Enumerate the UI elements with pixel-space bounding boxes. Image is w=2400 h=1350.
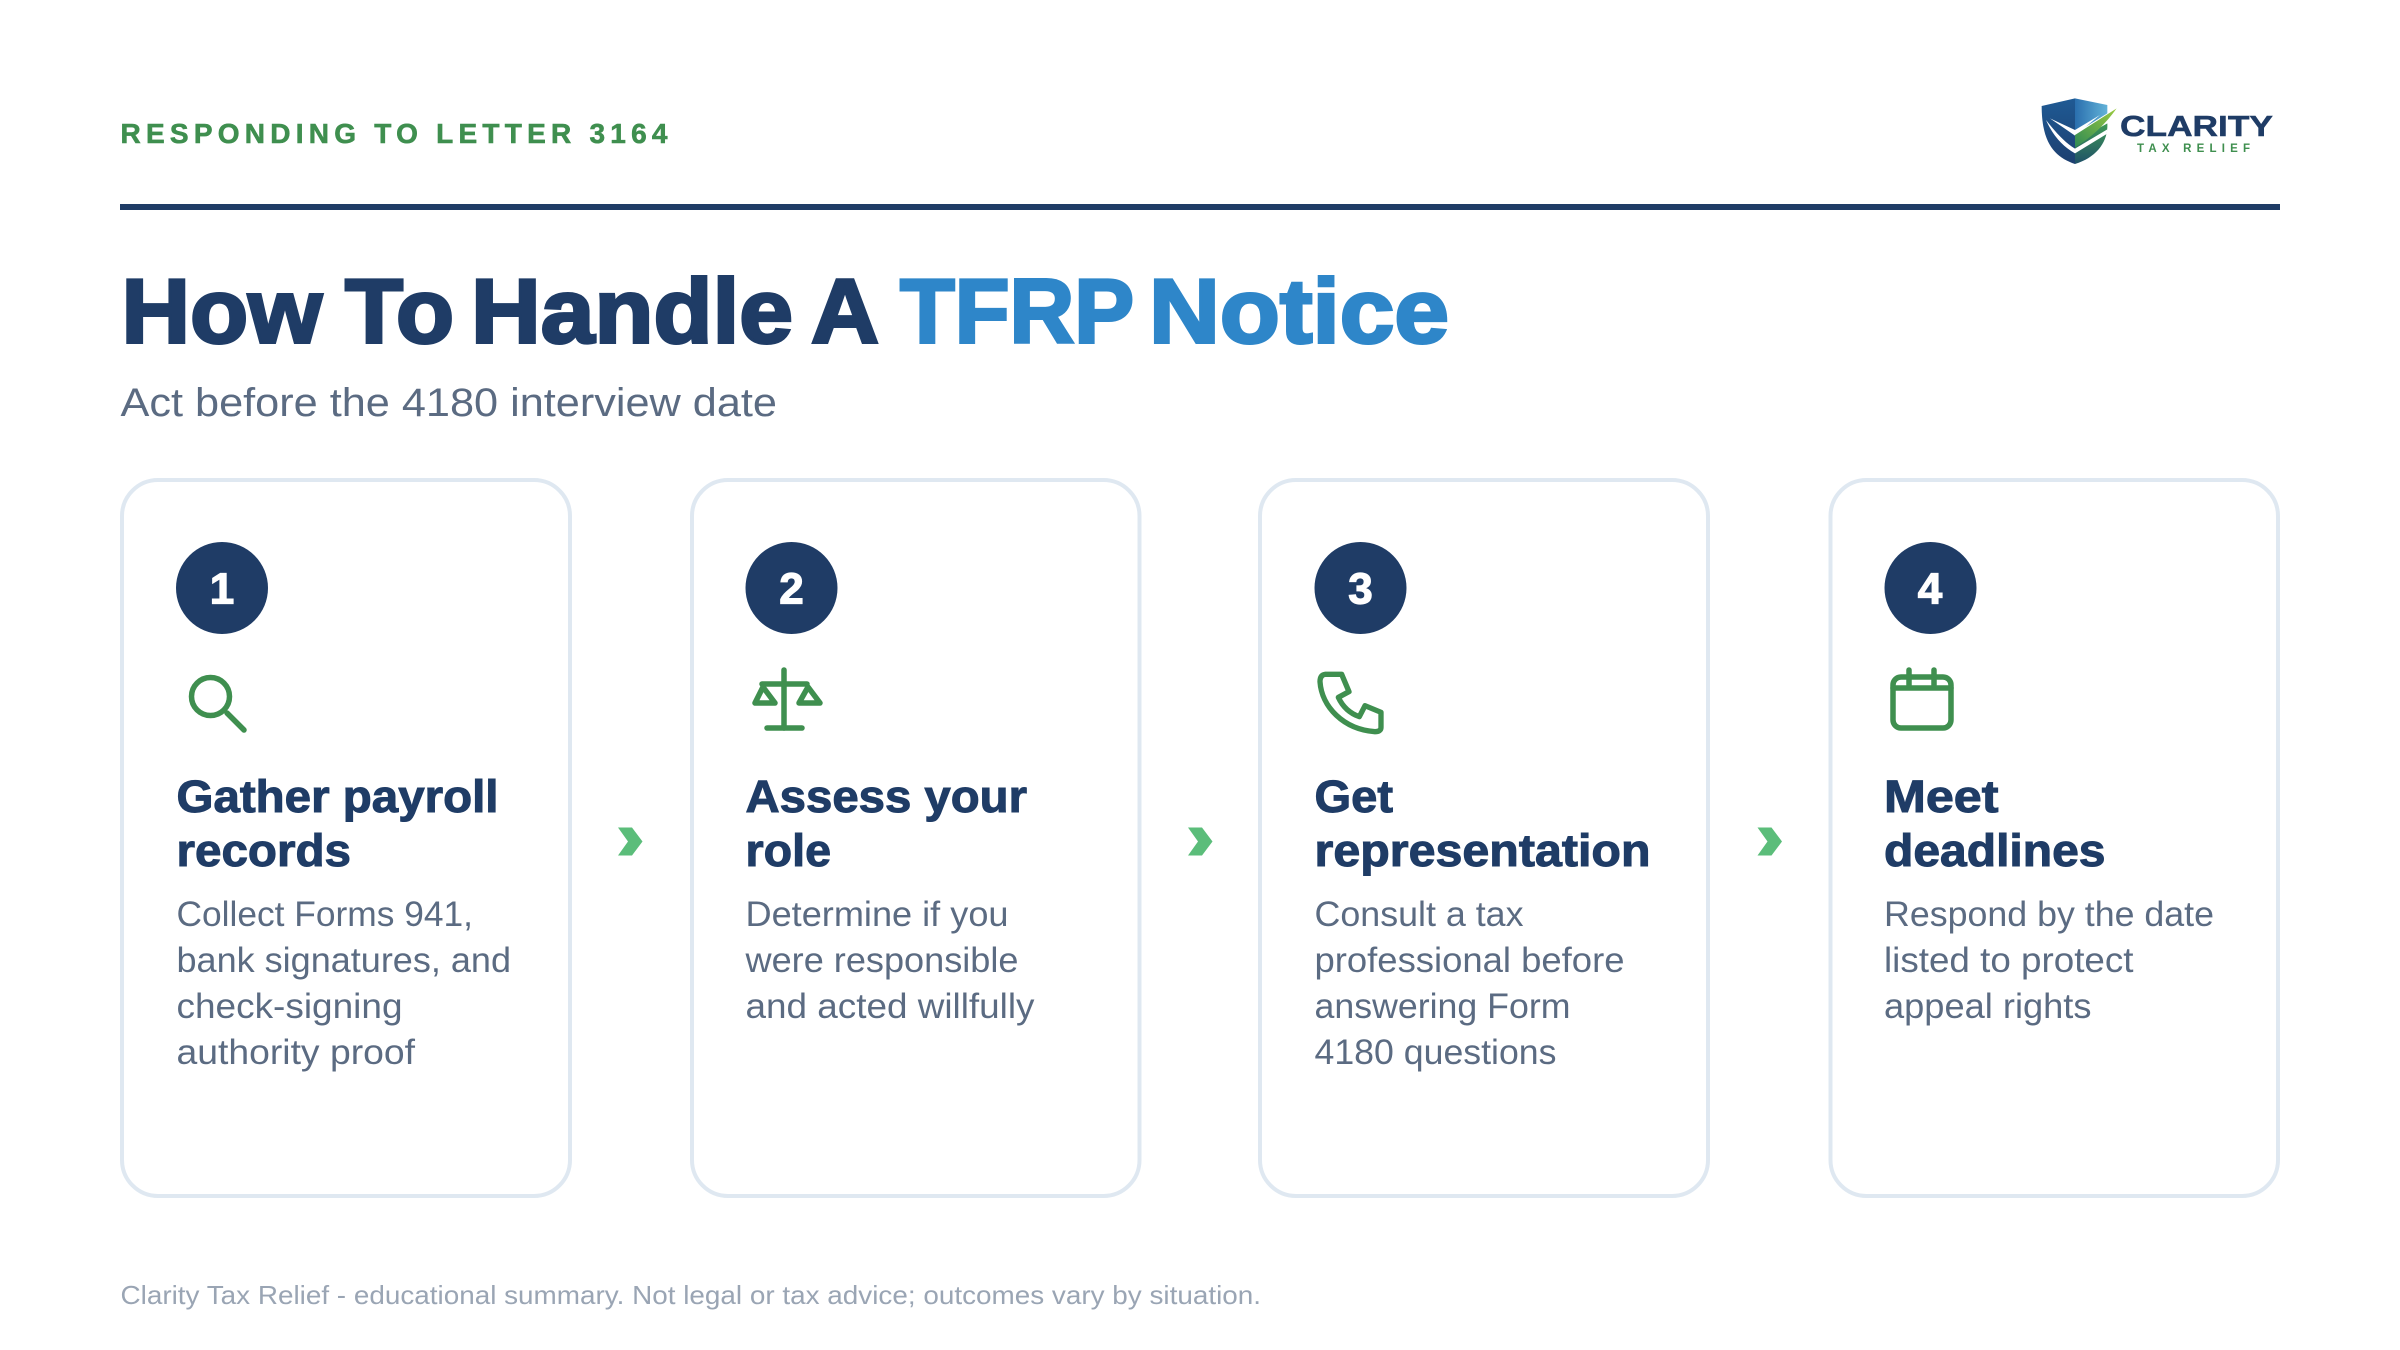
step 1 heading bbox=[176, 771, 498, 876]
step 4 description bbox=[1884, 895, 2214, 1026]
footer disclaimer: Clarity Tax Relief - educational summary. Not legal or tax advice; outcomes vary by situation. bbox=[120, 1280, 1261, 1310]
panel: step 4 meet deadlines bbox=[1830, 480, 2278, 1196]
step 3 heading: representation bbox=[1314, 825, 1650, 876]
step number 1: 1 bbox=[210, 564, 234, 614]
arrow: step 3 to 4 bbox=[1758, 828, 1782, 856]
step 3 description: professional before bbox=[1314, 941, 1624, 980]
step 3 description: answering Form bbox=[1314, 987, 1570, 1026]
title: TFRP bbox=[900, 262, 1134, 362]
step 4 description: appeal rights bbox=[1884, 987, 2092, 1026]
step 4 heading: deadlines bbox=[1884, 825, 2106, 876]
panel: step 3 get representation bbox=[1260, 480, 1708, 1196]
step 3 description: Consult a tax bbox=[1314, 895, 1524, 934]
step 3 heading: Get bbox=[1314, 771, 1393, 822]
panel: step 1 gather payroll records bbox=[122, 480, 570, 1196]
step 2 heading: role bbox=[746, 825, 831, 876]
step number 2 bbox=[746, 542, 838, 634]
step number 2: 2 bbox=[779, 564, 804, 614]
icon: magnifier bbox=[192, 678, 244, 730]
step 2 description: were responsible bbox=[744, 941, 1018, 980]
arrow: step 1 to 2 bbox=[618, 828, 642, 856]
step number 3 bbox=[1314, 542, 1406, 634]
icon: scales bbox=[755, 670, 820, 728]
step 1 description: bank signatures, and bbox=[176, 941, 511, 980]
step 4 heading bbox=[1884, 771, 2106, 876]
title bbox=[122, 262, 1449, 362]
step 1 heading: records bbox=[176, 825, 351, 876]
step number 3: 3 bbox=[1348, 564, 1373, 614]
step 1 description: check-signing bbox=[176, 987, 402, 1026]
panel: step 2 assess your role bbox=[692, 480, 1140, 1196]
title: To bbox=[345, 262, 454, 362]
eyebrow heading: RESPONDING TO LETTER 3164 bbox=[120, 118, 668, 149]
step 1 heading: Gather payroll bbox=[176, 771, 498, 822]
step 4 description: listed to protect bbox=[1884, 941, 2134, 980]
arrow: step 2 to 3 bbox=[1188, 828, 1212, 856]
step 2 description: and acted willfully bbox=[746, 987, 1035, 1026]
step number 1 bbox=[176, 542, 268, 634]
step 4 heading: Meet bbox=[1884, 771, 1999, 822]
step 1 description: Collect Forms 941, bbox=[176, 895, 473, 934]
step 3 description bbox=[1314, 895, 1624, 1072]
step 1 description: authority proof bbox=[176, 1033, 415, 1072]
icon: phone bbox=[1320, 674, 1381, 732]
step number 4: 4 bbox=[1918, 564, 1943, 614]
title: Notice bbox=[1149, 262, 1449, 362]
step 2 description: Determine if you bbox=[746, 895, 1008, 934]
step 3 heading bbox=[1314, 771, 1650, 876]
title: Handle bbox=[471, 262, 793, 362]
logo wordmark: CLARITY bbox=[2120, 111, 2273, 143]
logo tagline: TAX RELIEF bbox=[2137, 143, 2250, 155]
icon: calendar bbox=[1893, 670, 1951, 728]
step 2 heading bbox=[746, 771, 1027, 876]
subtitle: Act before the 4180 interview date bbox=[120, 381, 777, 425]
step 1 description bbox=[176, 895, 511, 1072]
icon: shield bbox=[2042, 98, 2117, 164]
title: How bbox=[122, 262, 322, 362]
step 2 heading: Assess your bbox=[746, 771, 1027, 822]
logo: Clarity Tax Relief bbox=[2042, 98, 2273, 164]
title: A bbox=[811, 262, 879, 362]
step 2 description bbox=[744, 895, 1035, 1026]
step 4 description: Respond by the date bbox=[1884, 895, 2214, 934]
step number 4 bbox=[1884, 542, 1976, 634]
step 3 description: 4180 questions bbox=[1314, 1033, 1556, 1072]
